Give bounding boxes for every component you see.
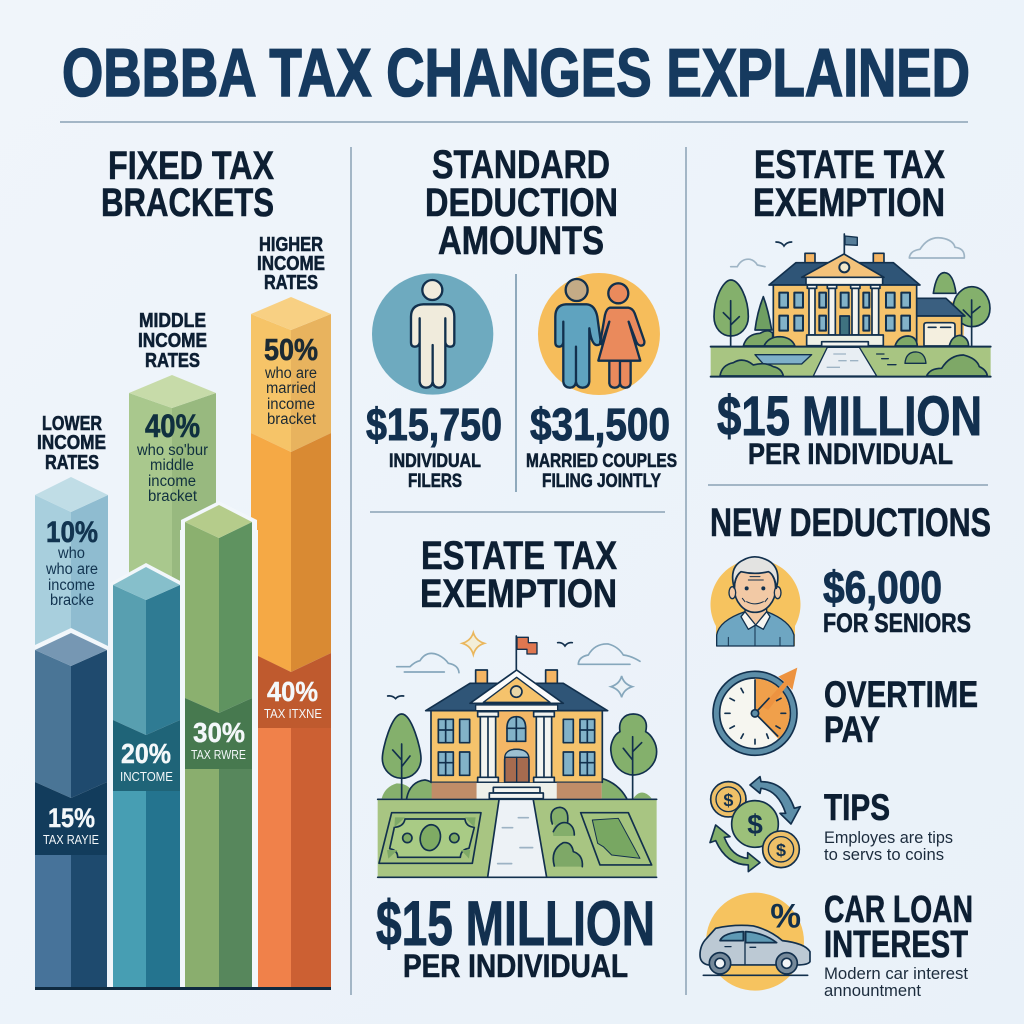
figure: 15 million center: PER INDIVIDUAL [403, 948, 628, 984]
figure: 15,750 individual filers: $15,750 [366, 399, 502, 450]
text: overtime pay [824, 674, 978, 750]
callout: 40 percent middle: 40% [145, 408, 200, 444]
heading: estate tax exemption right [753, 143, 945, 225]
text: tips: Employes are tips [824, 828, 953, 847]
callout: 50 percent: 50% [264, 332, 318, 367]
callout: 15 percent tax rate: TAX RAYIE [43, 832, 99, 847]
figure: 15,750 individual filers [366, 399, 502, 492]
labels: lower income rates: RATES [45, 452, 99, 474]
labels: middle income rates [138, 310, 207, 372]
figure: 31,500 married couples: $31,500 [530, 399, 670, 450]
heading: standard deduction amounts: STANDARD [432, 143, 610, 187]
text: car loan interest: CAR LOAN [824, 889, 973, 931]
icon: overtime clock [713, 668, 797, 755]
callout: 10 percent [45, 516, 98, 609]
callout: 20 percent income: INCTOME [120, 769, 173, 784]
panel: estate tax exemption right [711, 143, 991, 471]
callout: 15 percent tax rate: 15% [48, 803, 95, 833]
labels: lower income rates [37, 413, 106, 474]
icon: car loan: % [770, 897, 801, 935]
callout: 20 percent income [120, 738, 173, 784]
bar: dark blue 15 percent [35, 628, 108, 987]
callout: 50 percent: income [267, 396, 315, 413]
labels: lower income rates: INCOME [37, 432, 106, 454]
text: tips [824, 787, 953, 864]
icon: car loan [700, 893, 810, 991]
icon: tips coins: $ [723, 790, 733, 810]
text: overtime pay: OVERTIME [824, 674, 978, 715]
callout: 10 percent: who are [45, 561, 98, 578]
trees [382, 714, 421, 778]
heading: fixed tax brackets [101, 144, 274, 225]
bar: middle income light green [129, 375, 216, 600]
callout: 30 percent tax rate: 30% [193, 717, 245, 748]
heading: fixed tax brackets: BRACKETS [101, 181, 274, 225]
figure: 15,750 individual filers: FILERS [408, 471, 462, 492]
text: car loan interest: INTEREST [824, 924, 968, 966]
illustration: estate house [711, 234, 991, 377]
text: car loan interest: Modern car interest [824, 964, 968, 983]
callout: 40 percent middle: who so'bur [136, 442, 208, 459]
heading: estate tax exemption right: EXEMPTION [753, 181, 945, 225]
text: 6,000 for seniors: $6,000 [823, 562, 942, 613]
labels: higher income rates: HIGHER [259, 234, 323, 256]
bar: orange higher income [251, 297, 331, 987]
heading: estate tax exemption right: ESTATE TAX [754, 143, 945, 187]
left bill [379, 813, 481, 863]
icon: married couple [538, 273, 660, 395]
heading: fixed tax brackets: FIXED TAX [108, 144, 274, 188]
callout: 50 percent: married [266, 380, 316, 397]
labels: higher income rates: INCOME [257, 253, 325, 275]
text: tips: to servs to coins [824, 845, 944, 864]
labels: higher income rates: RATES [264, 272, 318, 294]
figure: 15 million right: PER INDIVIDUAL [748, 438, 953, 471]
callout: 40 percent middle: middle [150, 457, 194, 474]
labels: lower income rates: LOWER [42, 413, 102, 435]
callout: 40 percent tax rate: 40% [267, 676, 318, 707]
panel: estate tax exemption center [376, 534, 657, 984]
panel: new deductions [700, 501, 991, 1000]
text: car loan interest [824, 889, 973, 1000]
text: 6,000 for seniors [823, 562, 971, 638]
callout: 15 percent tax rate [43, 803, 99, 847]
callout: 40 percent tax rate [264, 676, 322, 721]
figure: 31,500 married couples: MARRIED COUPLES [526, 451, 677, 472]
text: 6,000 for seniors: FOR SENIORS [823, 608, 971, 638]
labels: higher income rates [257, 234, 325, 294]
callout: 10 percent: who [57, 545, 85, 562]
bar: teal 20 percent [110, 563, 184, 987]
callout: 30 percent tax rate: TAX RWRE [191, 747, 246, 762]
callout: 40 percent tax rate: TAX ITXNE [264, 706, 322, 721]
figure: 15,750 individual filers: INDIVIDUAL [389, 451, 481, 472]
icon: individual filer [372, 273, 493, 395]
callout: 50 percent: bracket [267, 411, 317, 428]
callout: 10 percent: 10% [46, 516, 98, 549]
heading: estate tax exemption center: ESTATE TAX [421, 534, 617, 578]
labels: middle income rates: RATES [145, 350, 200, 372]
callout: 40 percent middle [136, 408, 208, 505]
text: overtime pay: PAY [824, 709, 880, 750]
callout: 20 percent income: 20% [121, 738, 171, 769]
callout: 30 percent tax rate [191, 717, 246, 762]
text: tips: TIPS [824, 787, 890, 828]
callout: 40 percent middle: income [148, 473, 196, 490]
illustration: mansion with money lawn [378, 633, 657, 877]
panel: standard deduction amounts [366, 143, 677, 492]
bar: green 30 percent [180, 501, 258, 987]
labels: middle income rates: MIDDLE [139, 310, 206, 332]
callout: 10 percent: income [48, 577, 95, 594]
figure: 15 million right [717, 384, 982, 471]
callout: 50 percent [264, 332, 318, 428]
heading: estate tax exemption center: EXEMPTION [420, 572, 617, 616]
figure: 15 million center [376, 889, 655, 984]
figure: 31,500 married couples [526, 399, 677, 492]
icon: tips coins: $ [747, 809, 763, 840]
callout: 40 percent middle: bracket [148, 488, 198, 505]
heading: standard deduction amounts: AMOUNTS [438, 219, 604, 263]
right lawn [550, 807, 575, 836]
callout: 50 percent: who are [264, 365, 317, 382]
icon: tips coins: $ [776, 840, 786, 860]
heading: estate tax exemption center [420, 534, 617, 616]
heading: standard deduction amounts [425, 143, 618, 263]
figure: 15 million center: $15 MILLION [376, 889, 655, 959]
figure: 31,500 married couples: FILING JOINTLY [542, 471, 661, 492]
columns [477, 712, 557, 799]
panel: fixed tax brackets [35, 144, 331, 990]
bar baseline [35, 987, 331, 990]
windows [438, 717, 595, 775]
text: car loan interest: annountment [824, 981, 921, 1000]
bar: light blue lower income [35, 477, 108, 650]
icon: senior [710, 557, 800, 646]
labels: middle income rates: INCOME [138, 330, 207, 352]
icon: tips coins [710, 777, 800, 872]
callout: 10 percent: bracke [50, 592, 94, 609]
heading: standard deduction amounts: DEDUCTION [425, 181, 618, 225]
